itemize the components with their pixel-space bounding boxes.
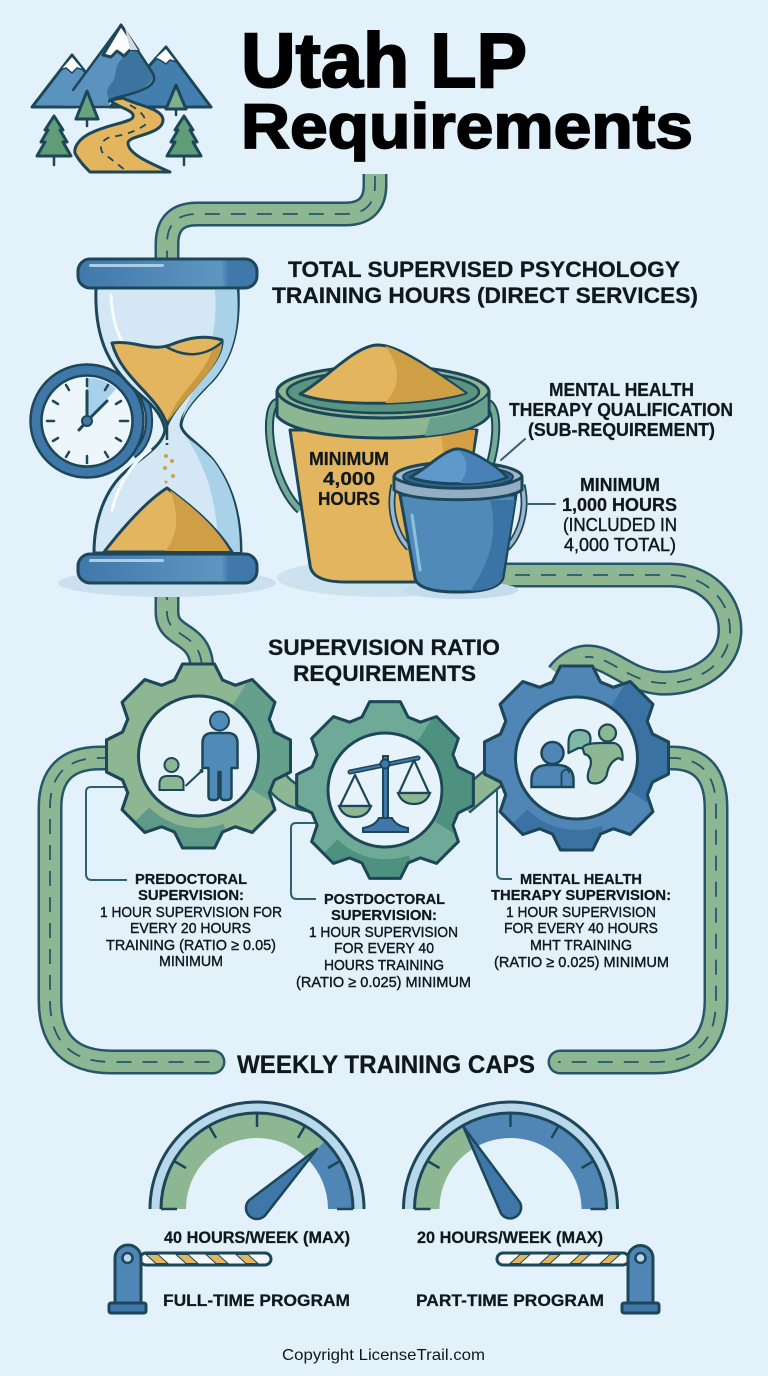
label: minimum 1,000 hours: 4,000 TOTAL) [564,535,676,555]
needle [464,1127,521,1218]
label: full-time program: FULL-TIME PROGRAM [163,1291,350,1310]
right small peak [110,47,211,107]
main peak [62,25,154,107]
needle [246,1149,317,1219]
blue band [462,1113,606,1209]
heading: supervision ratio requirements: REQUIREMENTS [293,661,476,686]
label: minimum 1,000 hours: MINIMUM [580,475,660,495]
scales post and base [383,756,388,821]
text: predoctoral supervision: 1 HOUR SUPERVISION FOR [100,904,282,921]
label: minimum 1,000 hours: (INCLUDED IN [563,515,677,535]
road: first gear to weekly caps [50,758,216,1062]
label: 40 hours per week: 40 HOURS/WEEK (MAX) [164,1229,350,1247]
bucket label: minimum 4,000 hours: MINIMUM [309,449,389,469]
icon: postdoctoral gear [297,702,473,878]
text: predoctoral supervision [100,871,282,970]
sand mound [300,345,466,403]
label: mental health therapy qualification: MENTAL HEALTH [549,380,694,400]
bucket label: minimum 4,000 hours: 4,000 [323,469,375,489]
green band [161,1113,325,1209]
upper sand [112,337,222,425]
counselor [542,742,564,764]
icon: mental health therapy gear [484,666,668,850]
heading: supervision ratio requirements: SUPERVISION RATIO [268,635,500,660]
text: predoctoral supervision: TRAINING (RATIO ≥ 0.05) [106,937,276,954]
icon: left barrier gate [109,1245,271,1313]
label: part-time program: PART-TIME PROGRAM [416,1291,604,1310]
powder mound [410,449,507,484]
label: mental health therapy qualification: (SUB-REQUIREMENT) [528,420,715,440]
gauge ring [404,1102,618,1209]
icon: large sand bucket [269,345,496,582]
icon: hourglass [78,259,257,583]
icon: clock [30,364,149,478]
text: postdoctoral supervision: (RATIO ≥ 0.025) MINIMUM [296,974,471,991]
handles [269,402,300,510]
label: mental health therapy qualification [509,380,733,440]
gauge: 20 hours per week [404,1102,618,1218]
winding road [75,98,170,172]
text: postdoctoral supervision: POSTDOCTORAL [324,891,445,908]
text: postdoctoral supervision: SUPERVISION: [331,907,437,924]
text: mental health therapy supervision: FOR EVERY 40 HOURS [504,920,658,937]
road: gear links [272,772,500,804]
text: mental health therapy supervision: MHT TRAINING [530,937,632,954]
rim [394,462,522,492]
icon: small blue bucket [392,449,524,599]
callout bracket: postdoctoral [291,823,316,899]
hourglass shadow [58,569,276,597]
text: mental health therapy supervision: THERAPY SUPERVISION: [491,887,671,904]
icon: mountains and road logo [32,25,211,172]
text: mental health therapy supervision: (RATIO ≥ 0.025) MINIMUM [494,954,669,971]
road: hourglass to gears [167,580,202,670]
pine trees [37,116,71,165]
pail [290,430,477,582]
large person [210,712,229,730]
heading: total supervised training hours: TOTAL SUPERVISED PSYCHOLOGY [288,257,680,282]
heading: total supervised training hours: TRAINING HOURS (DIRECT SERVICES) [272,283,698,308]
label: minimum 1,000 hours [562,475,677,555]
green band [414,1126,475,1209]
ticks [414,1113,606,1209]
small person [164,758,178,772]
left pan [340,775,370,806]
neck [166,422,168,445]
falling grains [163,454,175,484]
text: postdoctoral supervision: HOURS TRAINING [324,957,444,974]
handles [392,485,409,548]
text: predoctoral supervision: EVERY 20 HOURS [130,920,251,937]
gauge: 40 hours per week [150,1102,364,1219]
lower sand [104,488,232,552]
text: predoctoral supervision: SUPERVISION: [138,887,244,904]
blue band [307,1141,353,1209]
bucket shadow [277,559,493,597]
label: minimum 1,000 hours: 1,000 HOURS [562,495,677,515]
label: 20 hours per week: 20 HOURS/WEEK (MAX) [417,1229,603,1247]
road: bucket to third gear [495,575,730,683]
text: predoctoral supervision: PREDOCTORAL [135,871,247,888]
text: mental health therapy supervision [491,871,671,971]
heading: weekly training caps: WEEKLY TRAINING CAPS [237,1051,535,1079]
callout bracket: mental health therapy [497,790,512,879]
ticks [161,1113,353,1209]
speech bubble [568,730,590,753]
bottom cap [78,554,257,583]
text: postdoctoral supervision: FOR EVERY 40 [334,940,434,957]
title: Utah LP [241,18,527,104]
client [599,724,616,742]
label: mental health therapy qualification: THERAPY QUALIFICATION [509,400,733,420]
icon: right barrier gate [497,1246,659,1313]
text: predoctoral supervision: MINIMUM [159,953,223,970]
callout leader lines: buckets [501,439,555,504]
heading: supervision ratio requirements [268,635,500,686]
text: mental health therapy supervision: MENTAL HEALTH [520,871,642,888]
copyright: Copyright LicenseTrail.com [282,1347,485,1364]
glass [94,288,241,553]
icon: predoctoral gear [106,664,290,848]
bucket label: minimum 4,000 hours: HOURS [318,489,380,509]
rim [277,366,489,418]
heading: total supervised training hours [272,257,698,308]
text: postdoctoral supervision [296,891,471,991]
top cap [78,259,257,288]
pail [400,495,516,592]
bucket label: minimum 4,000 hours [309,449,389,509]
title [241,18,693,162]
road: third gear to weekly caps [558,758,716,1062]
left small peak [32,55,90,107]
gauge ring [150,1102,364,1209]
right pan [399,760,429,793]
scales beam [350,758,418,772]
text: postdoctoral supervision: 1 HOUR SUPERVISION [309,924,458,941]
callout bracket: predoctoral [86,787,127,880]
text: mental health therapy supervision: 1 HOUR SUPERVISION [506,904,656,921]
road: title to hourglass [167,174,375,262]
title: Requirements [241,92,693,162]
